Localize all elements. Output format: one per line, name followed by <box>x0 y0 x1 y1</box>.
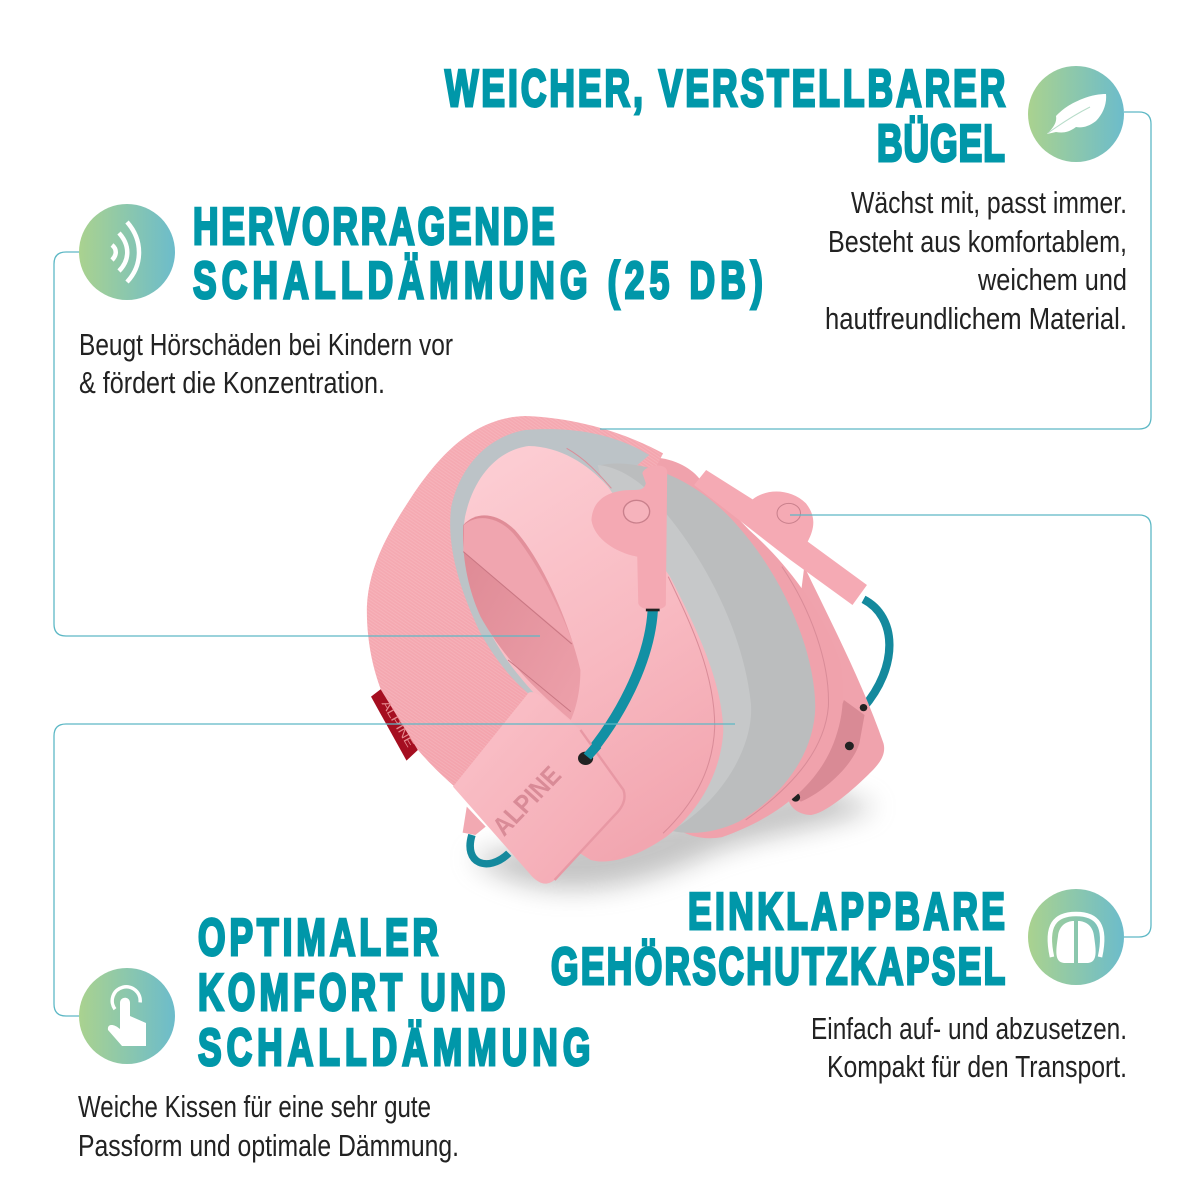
text block: Besteht aus komfortablem, <box>828 224 1127 259</box>
rear shell <box>629 457 843 838</box>
icon: sound waves <box>79 204 175 300</box>
connector: foldable capsule <box>790 515 1151 937</box>
front teal wire <box>585 611 653 759</box>
ground shadow <box>470 787 877 889</box>
panel: sound insulation <box>79 198 763 400</box>
shell rim lines <box>746 567 828 820</box>
bottom arm stub <box>463 807 486 835</box>
rear cap <box>789 567 884 815</box>
icon: feather <box>1028 66 1124 162</box>
text block <box>811 1011 1127 1084</box>
recess crease <box>463 552 572 712</box>
text block <box>825 185 1127 336</box>
front hub button <box>623 500 650 523</box>
rear hub button <box>777 503 800 523</box>
rear slider arm <box>694 470 867 605</box>
product photo: pink foldable ear muffs <box>367 416 889 889</box>
icon: ear muffs <box>1028 889 1124 985</box>
embossed ALPINE logo: ALPINE <box>487 761 567 841</box>
text block: Weiche Kissen für eine sehr gute <box>78 1089 431 1124</box>
connector: sound insulation <box>54 252 540 636</box>
rear cap inner recess <box>792 700 865 802</box>
cup rim line <box>567 448 715 833</box>
panel: foldable capsule <box>551 883 1127 1084</box>
grey inner band <box>450 429 649 697</box>
grey ear cushion front <box>598 465 751 832</box>
text block: hautfreundlichem Material. <box>825 301 1127 336</box>
heading <box>551 883 1005 996</box>
fabric headband <box>367 416 663 788</box>
cap side edge <box>555 730 625 880</box>
text block: & fördert die Konzentration. <box>79 365 385 400</box>
rear cap screws <box>791 704 867 802</box>
cap wire socket <box>578 752 593 765</box>
recess upper facet <box>463 518 573 643</box>
panel: soft adjustable headband <box>445 60 1127 336</box>
heading: WEICHER, VERSTELLBARER <box>445 60 1005 118</box>
text block <box>79 327 453 400</box>
front cap <box>453 692 625 884</box>
red ALPINE tag: ALPINE <box>379 699 416 750</box>
bottom teal wire <box>470 835 509 864</box>
heading <box>198 909 590 1077</box>
red ALPINE tag <box>371 689 418 761</box>
panel: comfort and insulation <box>78 909 590 1163</box>
cup recess <box>463 515 580 720</box>
text block: Beugt Hörschäden bei Kindern vor <box>79 327 453 362</box>
text block: Wächst mit, passt immer. <box>851 185 1127 220</box>
text block <box>78 1089 459 1163</box>
front slider arm <box>591 465 667 610</box>
grey ear cushion back <box>601 464 815 833</box>
rear teal wire <box>863 599 889 708</box>
text block: Passform und optimale Dämmung. <box>78 1128 459 1163</box>
heading: HERVORRAGENDE <box>193 198 555 256</box>
heading <box>193 198 763 310</box>
icon: touch hand <box>79 968 175 1064</box>
connector: comfort <box>54 724 735 1016</box>
text block: Kompakt für den Transport. <box>827 1049 1127 1084</box>
text block: weichem und <box>977 262 1127 297</box>
heading: KOMFORT UND <box>198 964 505 1022</box>
heading: SCHALLDÄMMUNG (25 DB) <box>193 252 763 310</box>
heading: BÜGEL <box>877 115 1005 173</box>
heading: OPTIMALER <box>198 909 438 967</box>
ear cup shell <box>463 446 723 862</box>
heading: EINKLAPPBARE <box>688 883 1005 941</box>
heading <box>445 60 1005 173</box>
heading: GEHÖRSCHUTZKAPSEL <box>551 938 1005 996</box>
heading: SCHALLDÄMMUNG <box>198 1019 590 1077</box>
connector: soft headband <box>600 112 1151 429</box>
